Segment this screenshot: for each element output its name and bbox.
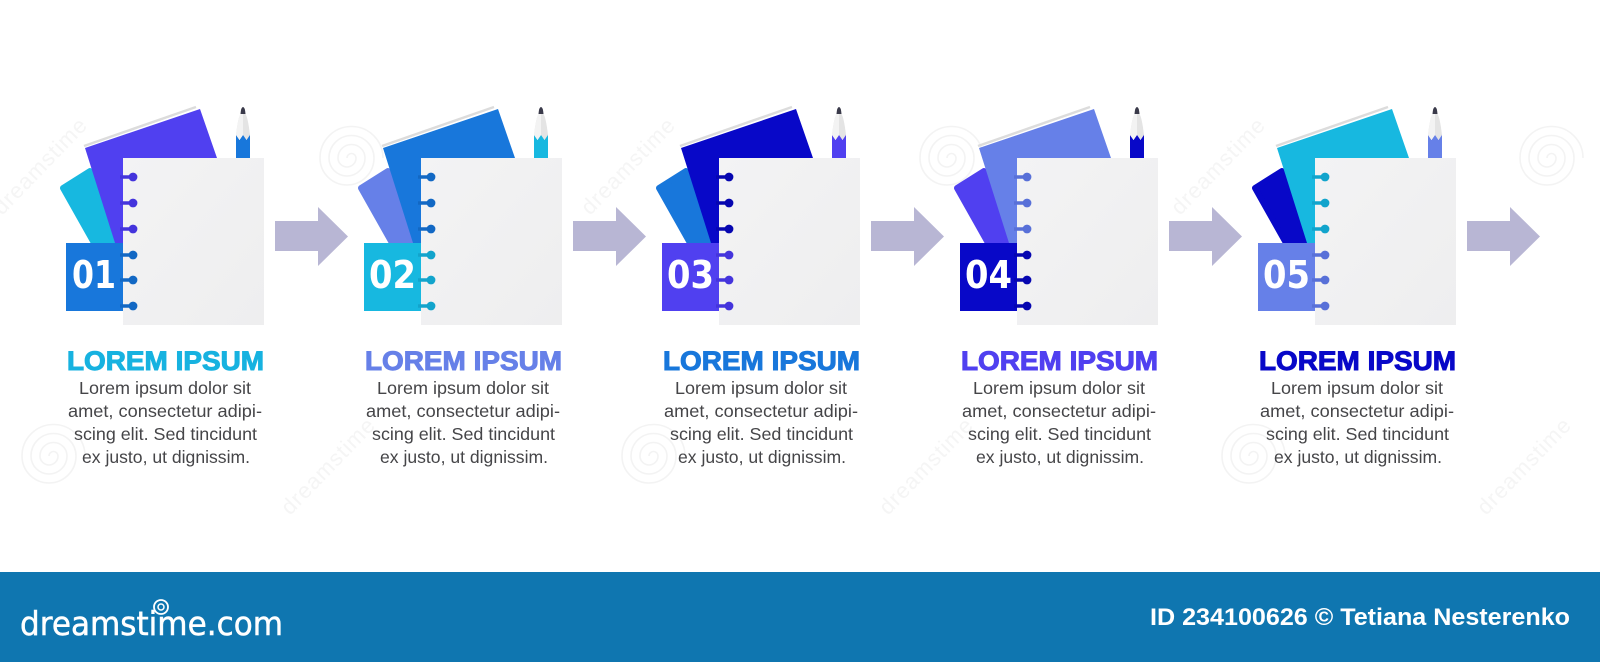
watermark pattern: dreamstime: [276, 412, 380, 519]
footer bar: [0, 572, 1600, 662]
watermark pattern: [0, 112, 1583, 519]
step 4: [957, 107, 1158, 467]
step 5 heading: LOREM IPSUM: [1259, 346, 1456, 376]
step 2 text: scing elit. Sed tincidunt: [372, 424, 555, 444]
step 1 text: ex justo, ut dignissim.: [82, 447, 250, 467]
arrow 1: [275, 207, 348, 266]
step 4 text: ex justo, ut dignissim.: [976, 447, 1144, 467]
step 1 heading: LOREM IPSUM: [67, 346, 264, 376]
step 1 text: scing elit. Sed tincidunt: [74, 424, 257, 444]
arrow 2: [573, 207, 646, 266]
step 2 text: [366, 378, 560, 467]
step 4 text: amet, consectetur adipi-: [962, 401, 1156, 421]
step 5 notebook icon: 05: [1263, 253, 1310, 297]
step 4 notebook icon: [957, 107, 1158, 325]
step 1 text: Lorem ipsum dolor sit: [79, 378, 251, 398]
watermark pattern: dreamstime: [576, 112, 680, 219]
step 2 text: ex justo, ut dignissim.: [380, 447, 548, 467]
step 4 text: [962, 378, 1156, 467]
step 4 heading: LOREM IPSUM: [961, 346, 1158, 376]
step 5 text: amet, consectetur adipi-: [1260, 401, 1454, 421]
step 5 text: [1260, 378, 1454, 467]
step 5 text: scing elit. Sed tincidunt: [1266, 424, 1449, 444]
step 1 notebook icon: [63, 107, 264, 325]
watermark pattern: dreamstime: [1166, 112, 1270, 219]
step 1 text: [68, 378, 262, 467]
step 3 text: scing elit. Sed tincidunt: [670, 424, 853, 444]
watermark pattern: dreamstime: [1472, 412, 1576, 519]
step 3 text: amet, consectetur adipi-: [664, 401, 858, 421]
step 2 notebook icon: [361, 107, 562, 325]
step 4 text: Lorem ipsum dolor sit: [973, 378, 1145, 398]
step 2 heading: LOREM IPSUM: [365, 346, 562, 376]
arrow 3: [871, 207, 944, 266]
step 3 text: Lorem ipsum dolor sit: [675, 378, 847, 398]
step 2 notebook icon: 02: [369, 253, 416, 297]
step 5 notebook icon: [1255, 107, 1456, 325]
arrow 5: [1467, 207, 1540, 266]
step 1: [63, 107, 264, 467]
step 4 notebook icon: 04: [965, 253, 1012, 297]
step 2 text: Lorem ipsum dolor sit: [377, 378, 549, 398]
arrow 4: [1169, 207, 1242, 266]
watermark pattern: dreamstime: [874, 412, 978, 519]
step 3 heading: LOREM IPSUM: [663, 346, 860, 376]
step 5 text: ex justo, ut dignissim.: [1274, 447, 1442, 467]
step 5 text: Lorem ipsum dolor sit: [1271, 378, 1443, 398]
step 3 notebook icon: 03: [667, 253, 714, 297]
footer credit: ID 234100626 © Tetiana Nesterenko: [1150, 604, 1570, 631]
step 1 text: amet, consectetur adipi-: [68, 401, 262, 421]
step 3: [659, 107, 860, 467]
step 2: [361, 107, 562, 467]
footer logo: dreamstime.com: [20, 604, 283, 643]
step 3 text: ex justo, ut dignissim.: [678, 447, 846, 467]
step 5: [1255, 107, 1456, 467]
step 4 text: scing elit. Sed tincidunt: [968, 424, 1151, 444]
step 2 text: amet, consectetur adipi-: [366, 401, 560, 421]
step 1 notebook icon: 01: [72, 253, 116, 297]
step 3 text: [664, 378, 858, 467]
step 3 notebook icon: [659, 107, 860, 325]
